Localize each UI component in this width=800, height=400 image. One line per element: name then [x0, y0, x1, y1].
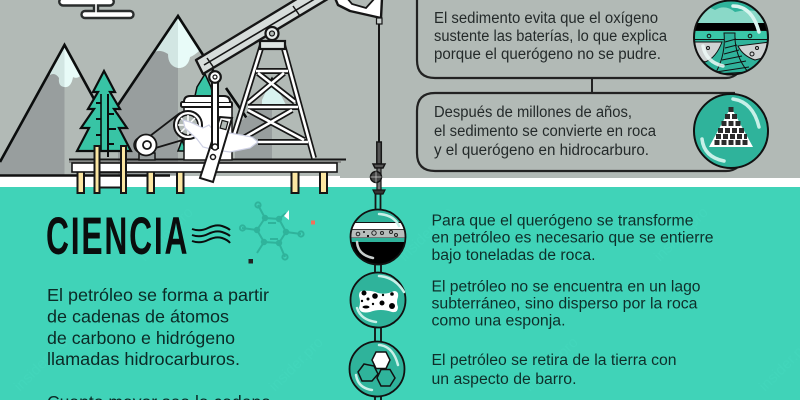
icon: rock pyramid circle	[694, 94, 768, 168]
icon: waves	[192, 225, 230, 243]
tree: small pine behind pump	[195, 74, 213, 96]
text: burial: bajo toneladas de roca.	[432, 247, 596, 264]
post	[320, 170, 327, 193]
valve wheel	[370, 172, 382, 182]
post	[177, 170, 184, 193]
text: left body: de carbono e hidrógeno	[47, 328, 235, 348]
text: sediment	[434, 10, 667, 63]
flywheel	[174, 111, 202, 139]
polished rod and wellhead	[370, 24, 385, 209]
text: mud: un aspecto de barro.	[432, 371, 576, 388]
text: burial: en petróleo es necesario que se entierre	[432, 230, 714, 247]
text: sponge: El petróleo no se encuentra en un lago	[432, 279, 700, 296]
accent: black square	[248, 259, 253, 264]
pitman rod	[209, 71, 221, 150]
text: millions of years: Después de millones de años,	[434, 104, 632, 121]
watermark: insider.pro	[396, 204, 457, 265]
icon: sediment circle	[693, 0, 770, 74]
horse head	[335, 0, 382, 24]
text: sediment: El sedimento evita que el oxígeno	[434, 10, 658, 27]
text: mud	[432, 352, 676, 388]
watermark: insider.pro	[11, 334, 72, 395]
text: millions of years	[434, 104, 656, 159]
accent: red square	[311, 220, 315, 224]
watermark: insider.pro	[651, 204, 712, 265]
accent: white shard	[284, 210, 289, 220]
crank counterweight	[183, 120, 258, 152]
mountain: left	[0, 45, 94, 175]
post	[78, 170, 84, 193]
icon: hexagons circle	[350, 342, 404, 396]
icon: burial circle	[350, 210, 406, 266]
text: left body: llamadas hidrocarburos.	[47, 349, 240, 369]
post	[148, 170, 154, 193]
derrick tower	[234, 41, 314, 158]
text: burial	[432, 213, 714, 264]
ground line	[0, 174, 170, 177]
text: sponge: como una esponja.	[432, 313, 566, 330]
small pulley stand	[139, 153, 155, 160]
tree: large pine	[77, 71, 131, 157]
speech box 2	[417, 93, 738, 171]
watermark: insider.pro	[136, 204, 197, 265]
background: sky	[0, 0, 800, 179]
watermark: insider.pro	[521, 334, 582, 395]
crank plate	[200, 117, 232, 182]
background: snow band	[0, 176, 800, 187]
post	[292, 170, 298, 193]
text: mud: El petróleo se retira de la tierra con	[432, 352, 676, 369]
watermark	[11, 204, 800, 395]
connector	[591, 78, 593, 93]
watermark: insider.pro	[266, 334, 327, 395]
text: millions of years: el sedimento se convierte en roca	[434, 123, 656, 140]
mountain: far right	[235, 78, 286, 160]
icon: sponge circle	[350, 272, 406, 328]
small pulley	[134, 134, 156, 156]
text: left body	[47, 285, 271, 400]
text: burial: Para que el querógeno se transforme	[432, 213, 694, 230]
platform deck	[69, 160, 346, 172]
mountains	[0, 16, 286, 175]
clouds	[59, 0, 134, 18]
icon: molecule	[240, 202, 304, 260]
background: teal ground	[0, 187, 800, 400]
text: millions of years: y el querógeno en hidrocarburo.	[434, 142, 649, 159]
walking beam	[196, 0, 331, 74]
text: sponge	[432, 279, 700, 330]
drive belt	[150, 113, 186, 149]
speech box 1	[417, 0, 738, 78]
text: left body: El petróleo se forma a partir	[47, 285, 269, 305]
text: left body: de cadenas de átomos	[47, 306, 229, 326]
heading: ciencia: CIENCIA	[46, 207, 189, 266]
tree: small pine behind engine	[178, 140, 186, 151]
ladder	[94, 146, 126, 193]
platform supports	[78, 170, 327, 193]
text: sediment: porque el querógeno no se pudre.	[434, 46, 661, 63]
engine housing	[181, 96, 232, 160]
beam pivot	[266, 27, 278, 40]
pipe	[375, 262, 381, 400]
text: sponge: subterráneo, sino disperso por la roca	[432, 296, 698, 313]
text: sediment: sustente las baterías, lo que explica	[434, 28, 667, 45]
mountain: centre	[116, 16, 248, 175]
